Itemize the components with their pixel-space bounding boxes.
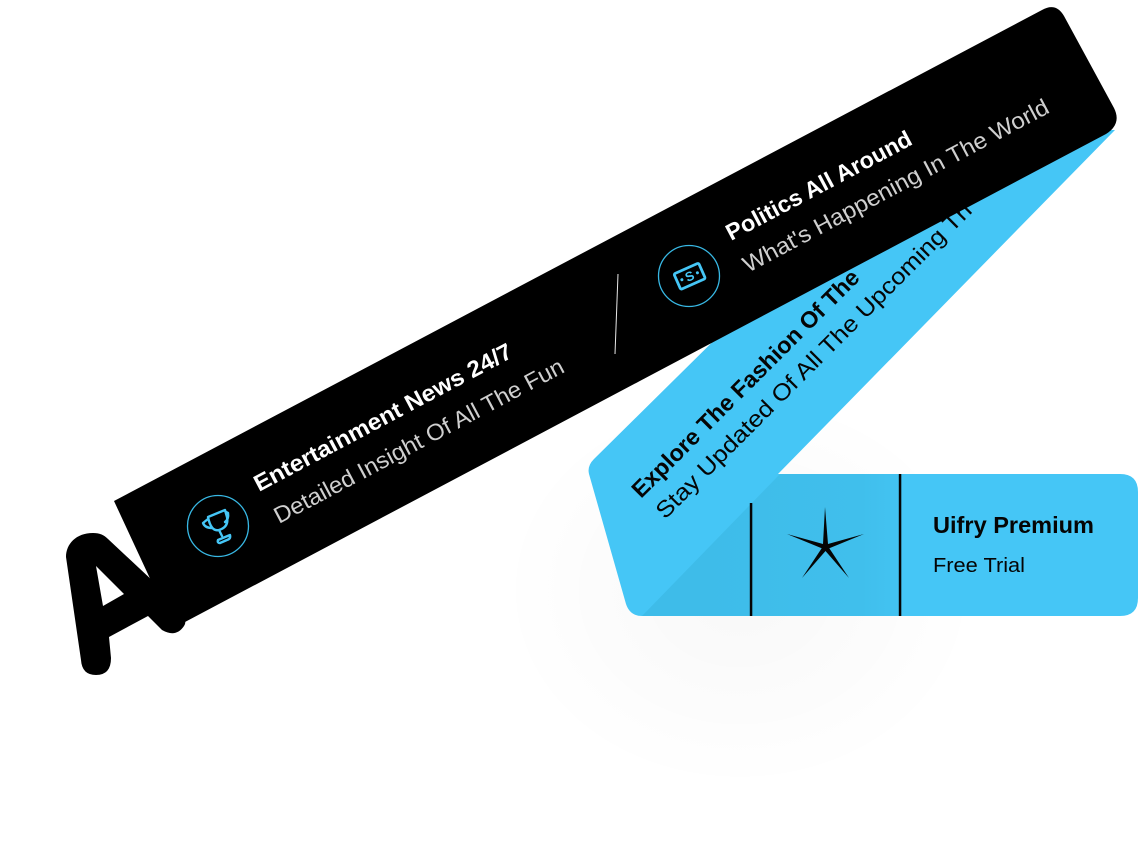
panel: black ribbon (114, 7, 1117, 622)
icon: money (658, 246, 720, 306)
fold shading (642, 474, 900, 616)
icon: trophy (188, 496, 248, 556)
divider right (899, 474, 901, 616)
text: fashion heading: Explore The Fashion Of The (626, 264, 864, 503)
text: politics subtitle: What's Happening In The World (738, 93, 1053, 277)
divider left (750, 503, 752, 616)
text: entertainment subtitle: Detailed Insight Of All The Fun (269, 353, 568, 528)
icon: money: S (683, 268, 697, 285)
text: entertainment heading: Entertainment News 24/7 (249, 338, 517, 496)
divider (615, 274, 618, 354)
soft shadow (500, 390, 980, 790)
text: free trial: Free Trial (933, 555, 1025, 577)
panel: blue folded ribbon (589, 130, 1138, 616)
icon: star (787, 507, 864, 578)
text: premium title: Uifry Premium (933, 512, 1094, 538)
letter A (66, 533, 185, 675)
text: fashion subtitle: Stay Updated Of All The Upcoming Th (650, 197, 977, 524)
text: politics heading: Politics All Around (721, 125, 916, 245)
